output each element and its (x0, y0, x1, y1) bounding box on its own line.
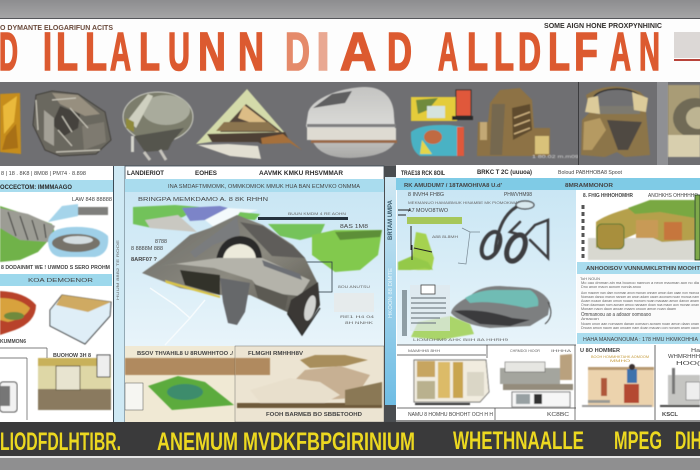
white sign (125, 383, 143, 410)
main title: D (285, 23, 310, 82)
people label: U 8O HOMMER (580, 348, 620, 354)
lower right label: FLMGHI RMHHH8V (248, 351, 304, 357)
bottom caption: FOOH BARMEB BO SBBETOOHD (266, 412, 362, 418)
left lower room illustration (38, 355, 111, 410)
icon: carved padlock (581, 87, 650, 157)
centre header: LANDIERIOT (127, 170, 164, 177)
band: lower blue (577, 333, 700, 344)
diagram note lines (408, 192, 532, 214)
forklift labels: KSCL (662, 412, 678, 418)
text block: Onon daomaan nom aonam amoo nanaam doan noa maon aon monan onan (581, 303, 699, 307)
main title (0, 23, 660, 82)
footer word 3: WHETHNAALLE (453, 427, 584, 455)
footer banner (0, 422, 700, 458)
left small text: KUMMON6 (0, 339, 26, 345)
dark gap strip (384, 166, 396, 422)
people label: MMHO (610, 359, 631, 363)
icon: stone capsule (306, 87, 397, 158)
left kiosk illustration (0, 382, 17, 412)
main title: A (340, 23, 376, 82)
right blue band (396, 178, 700, 190)
label text: A88 8L8MH (432, 235, 459, 239)
right big diagram (397, 190, 576, 345)
right side legend (695, 195, 700, 260)
lighter side strip (657, 82, 668, 166)
small chart card: RE1 H4 04 (340, 315, 374, 319)
map label bar (258, 212, 348, 220)
green base (411, 316, 474, 340)
right blue band: 8MRAMMONOR (565, 183, 613, 189)
left blue band (0, 180, 113, 192)
forklift labels: Ha (691, 348, 700, 354)
centre header: EOHES (195, 170, 218, 177)
glasses-shaped rover (478, 201, 548, 264)
right top illustration (577, 190, 700, 263)
main title: I (316, 23, 330, 82)
band: lower blue: HAHA MANAONOUMA : 178 HMU HKMKOHHIA (583, 337, 699, 343)
right blue band: RK AMUDUM7 / 18TAMOHIVA8 U.d' (404, 183, 502, 189)
text block: Aon maoner nan dam nonman anon monan onnam amon dan oaan non monoa (581, 291, 699, 295)
footer word 4: MPEG (614, 427, 662, 455)
wood beam (125, 358, 270, 375)
icon: brown temple: 1 80.02 m.m09 (532, 154, 580, 159)
icon row background (0, 82, 700, 166)
canoe and tent (235, 355, 382, 408)
hovercraft illustration (142, 215, 320, 335)
main title: N (238, 23, 264, 82)
forklift labels: WHMRHHH (668, 354, 700, 360)
main title: L (139, 23, 160, 82)
text block (577, 274, 700, 333)
second blue band: KOA DEMOENOR (28, 278, 94, 284)
diagram note lines: 8 INVH4 FH8G (408, 192, 444, 198)
top grey band (0, 0, 700, 18)
illustration label: 8. FHIG HHHOHOMHR (583, 193, 633, 199)
main title: A (438, 23, 458, 82)
text block: Aoam noaon danan omon noaan monom noan maoaan amon danon anam (581, 299, 699, 303)
forklift labels (662, 348, 700, 418)
main title: D (518, 23, 541, 82)
light blue strip: HUUM 8882 TE ROOE (116, 239, 120, 300)
icon: map cards (411, 90, 473, 156)
main title: A (110, 23, 131, 82)
band: caption (577, 262, 700, 274)
icon: brown temple (477, 88, 580, 159)
map side labels: 8ARF07 ? (131, 257, 157, 263)
left illustration: layered dish (0, 291, 36, 335)
left caption: 8 DODAINMT WE ! UWMOD S SERO PROHM (1, 265, 110, 271)
right header: Boloud PABHHOBA8 Spoot (558, 170, 623, 176)
tan wall scene (582, 364, 654, 407)
text block: Dnoan amon naom aan onoam nam doan maoan oon nonam anam oaon (581, 326, 699, 330)
panel: left column (0, 166, 113, 422)
tan floor plan (414, 360, 489, 405)
band: caption: ANHOOISOV VUNNUMKLRTHIN MOOHT (586, 266, 700, 272)
green hill (398, 232, 434, 270)
vertical ticks (582, 205, 584, 260)
left blue band: OCCECTOM: IMMMAAGO (0, 184, 72, 191)
text block: Ommanoou ao a adoaor oomoaoo (581, 312, 651, 318)
small chart card: 8OU ANUTSU (338, 285, 371, 289)
people label (580, 348, 649, 363)
main title: D (387, 23, 412, 82)
text block: Nomaan danoo maron nanom an anon adam oaom aoonam noan monoa nam (581, 295, 699, 299)
light blue strip (113, 166, 125, 422)
map side labels (131, 224, 368, 263)
pool vessel (451, 286, 551, 328)
terraces (588, 200, 700, 260)
lower forklift panel (656, 346, 700, 420)
plan caption right: KC8BC (547, 412, 569, 418)
lower people panel (577, 345, 655, 420)
left illustration: box (50, 295, 111, 344)
main title: D (0, 23, 18, 82)
second blue band (0, 274, 112, 286)
centre header (127, 170, 343, 177)
centre lower left panel (125, 346, 270, 422)
banner small caption right: SOME AIGN HONE PROXPYNHINIC (544, 21, 663, 30)
diagram caption: LIOMOHM9 AHK BIIH 8A HHRH9 (413, 338, 508, 342)
main title: U (168, 23, 190, 82)
plan labels: IHHHA (551, 349, 572, 353)
plan labels (408, 349, 572, 353)
green pool diorama (148, 376, 234, 410)
lower left label: BSOV THVAHIL8 U 8RUWHHTOO ./ (137, 351, 234, 357)
bottom grey band (0, 458, 700, 470)
map heading: BRINGPA MEMKDAMO A. 8 8K RHHN (138, 197, 269, 203)
left illustration: rock and pod (0, 204, 108, 262)
map label bar: BUUN KMDM 4 RE AOHN (288, 212, 347, 216)
divider line (578, 82, 579, 166)
blue side strip: HKOON 88 DIMTE (388, 267, 394, 318)
text block: Mo oao dmman ain ma bounoo nannon a neon maoman aon no dia (581, 281, 699, 285)
diagram note lines: A7 MOVO8TWO (408, 208, 448, 214)
main title: F (574, 23, 598, 82)
main title: L (494, 23, 514, 82)
centre header: AAVMK KMKU RHSVMMAR (259, 170, 343, 177)
forklift labels: HOO( (676, 361, 700, 367)
main title: L (467, 23, 488, 82)
right header: TRAE18 RCK 8OIL (401, 170, 445, 177)
map side labels: 8AS 1M8 (340, 224, 368, 230)
footer word 2: ANEMUM MVDKFBPGIRINIUM (157, 428, 415, 456)
forklift (660, 368, 700, 407)
diagram thin leaders (458, 228, 480, 264)
map side labels: 8 8888M 888 (131, 246, 163, 252)
text block: Dno anon maon aonom nonda anoo (581, 285, 641, 289)
main title: I (43, 23, 52, 82)
illustration label: ANOHKHS OHHHHHO (648, 193, 698, 199)
centre lower right panel (235, 346, 384, 422)
right header (401, 169, 623, 177)
icon: spiral relief (668, 85, 700, 157)
centre blue band (125, 179, 384, 192)
right header: BRKC T 2C (uuuoa) (477, 169, 532, 176)
panel: right main (396, 165, 700, 420)
green label bar (407, 217, 462, 224)
left small label: LAW 848 88888 (72, 197, 112, 203)
icon: triangular layered roof (196, 89, 302, 159)
left lower header: BUOHOW 3H 8 (53, 353, 91, 359)
text block: Amaoon (581, 317, 599, 321)
banner small caption left: O DYMANTE ELOGARIFUN ACITS (0, 23, 113, 32)
icon: metal relief (33, 91, 111, 156)
lower plan panel (397, 345, 576, 420)
map land shapes (133, 205, 382, 272)
main title: N (639, 23, 660, 82)
main title: L (85, 23, 107, 82)
left column dividers (0, 348, 47, 420)
main title: L (56, 23, 78, 82)
text block: Noam onon aan nomaam danan oomaon aonam noan amon daan onan (581, 322, 699, 326)
blue side strip (385, 177, 396, 405)
plan caption left: NAMU 8 HOMHU BOHOHT OCH H H (408, 412, 493, 418)
left header: 8 | 18 . 8K8 | 8M08 | PM74 · 8.898 (1, 171, 86, 177)
main title: L (548, 23, 570, 82)
footer word 1: LIODFDLHTIBR. (0, 428, 121, 456)
thin posts (398, 210, 432, 260)
text block: ToH NOUN (580, 277, 601, 281)
people label: BOOH HOMMHKTAHK AOMOOM (591, 355, 649, 359)
plan labels: CHRMDOI HIOOR (510, 349, 541, 353)
machine sketch (500, 354, 573, 407)
white coast line (150, 288, 205, 345)
map side labels: 8788 (155, 239, 167, 245)
small chart card (306, 262, 374, 325)
blue side strip: BRTAM UMPA (388, 199, 394, 240)
diagram note lines: MEKMANUO HAMAIBMUK HINAMBE MK PIOMOKIWANOO (408, 201, 528, 205)
main title: N (198, 23, 226, 82)
icon: gold tile (0, 93, 21, 154)
diagram note lines: PHWVHM98 (504, 192, 532, 198)
plan labels: MAMHH8 8HH (408, 349, 441, 353)
icon: glass dome (123, 92, 193, 160)
illustration label (583, 193, 698, 199)
data sheet (402, 285, 450, 336)
small chart card: 8H NNHK (345, 321, 374, 325)
text block: Monam naon daon anoan maam onoon amon noan daam (581, 307, 676, 311)
second green hill (398, 256, 433, 270)
title banner (0, 18, 700, 82)
panel: centre (125, 166, 384, 422)
centre blue band: INA SMDAFTMMOMK, OMMKOMIOK MMUK HUA BAN ECMVKO ONMMA (168, 184, 361, 190)
centre main map (125, 192, 384, 346)
main title: A (610, 23, 631, 82)
